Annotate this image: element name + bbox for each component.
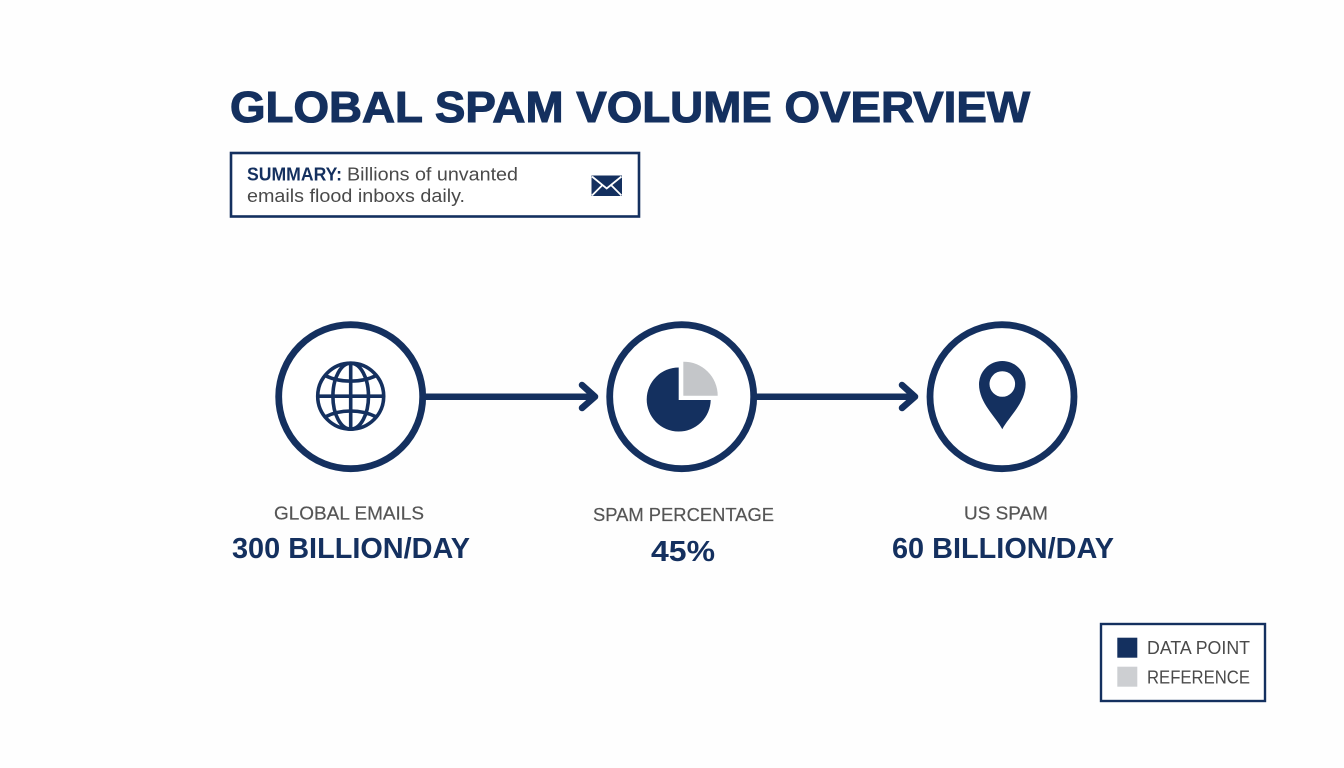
- summary text: SUMMARY:: [247, 164, 342, 184]
- summary text: emails flood inboxs daily.: [247, 186, 465, 206]
- icon: location pin: [979, 361, 1026, 429]
- legend item: data point: DATA POINT: [1147, 638, 1250, 658]
- legend: [1101, 624, 1265, 701]
- icon: envelope: [592, 176, 622, 196]
- value: 300 billion/day: 300 BILLION/DAY: [232, 533, 470, 565]
- legend item: reference: [1117, 667, 1250, 688]
- label: spam percentage: SPAM PERCENTAGE: [593, 504, 774, 525]
- arrow: global emails to spam percentage: [425, 385, 595, 408]
- icon: globe: [318, 363, 384, 429]
- label: US spam: US SPAM: [964, 502, 1048, 524]
- label: global emails: GLOBAL EMAILS: [274, 502, 424, 524]
- arrow: spam percentage to US spam: [756, 385, 915, 408]
- node: global emails circle with globe: [279, 325, 423, 469]
- value: 45%: 45%: [651, 536, 715, 568]
- node: spam percentage circle with pie: [610, 325, 754, 469]
- panel: summary: [231, 153, 639, 216]
- summary text: Billions of unvanted: [347, 164, 518, 184]
- summary text: [247, 164, 518, 206]
- title: GLOBAL SPAM VOLUME OVERVIEW: [230, 83, 1030, 132]
- value: 60 billion/day: 60 BILLION/DAY: [892, 533, 1114, 565]
- node: US spam circle with pin: [930, 325, 1074, 469]
- legend item: reference: REFERENCE: [1147, 668, 1250, 688]
- icon: pie chart: [647, 362, 718, 432]
